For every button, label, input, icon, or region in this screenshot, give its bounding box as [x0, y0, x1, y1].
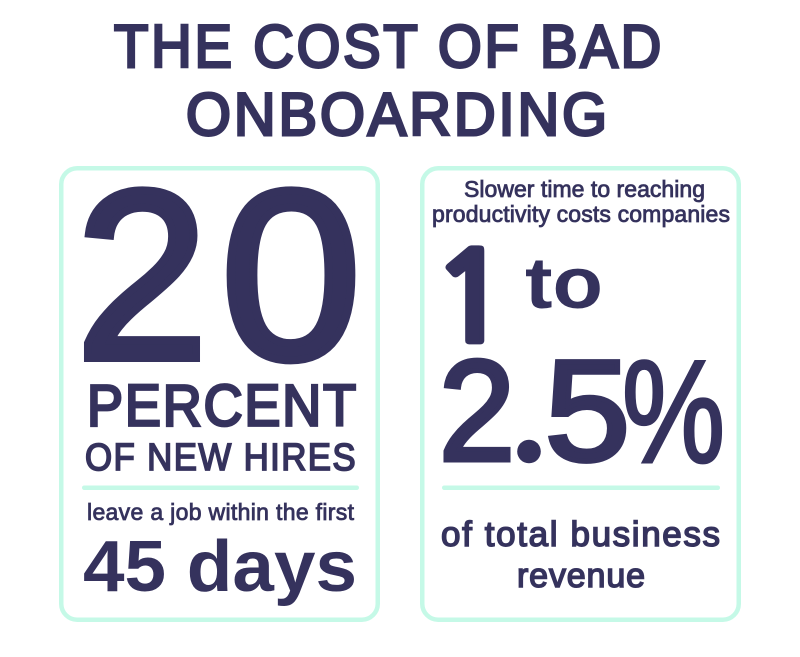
leave a job text: leave a job within the first [87, 499, 355, 525]
title [114, 13, 664, 148]
big number 2.5%: . [510, 331, 548, 488]
title: THE COST OF BAD [114, 13, 664, 80]
big number 2.5%: 5 [545, 332, 630, 491]
big number 2.5%: % [622, 330, 725, 493]
big number 20 [76, 141, 361, 409]
OF NEW HIRES label: OF NEW HIRES [85, 437, 357, 479]
big number 20: 0 [221, 141, 361, 409]
big number 2.5%: 2 [439, 332, 515, 491]
45 days: 45 days [83, 527, 357, 607]
intro text [432, 176, 730, 227]
title: ONBOARDING [186, 81, 610, 148]
panel: 20 percent of new hires [61, 141, 378, 620]
panel border left [61, 168, 378, 620]
revenue text [441, 515, 720, 595]
divider left [82, 486, 359, 490]
intro text: Slower time to reaching [464, 176, 705, 202]
big number 1: 1 [430, 237, 513, 361]
to: to [525, 244, 603, 324]
panel: productivity costs [422, 168, 739, 620]
big number 20: 2 [76, 141, 208, 409]
intro text: productivity costs companies [432, 201, 730, 227]
divider right [442, 486, 720, 490]
panel border right [422, 168, 739, 620]
PERCENT label: PERCENT [87, 374, 358, 439]
revenue text: of total business [441, 515, 720, 554]
revenue text: revenue [517, 557, 645, 595]
big number 2.5% [439, 330, 725, 493]
